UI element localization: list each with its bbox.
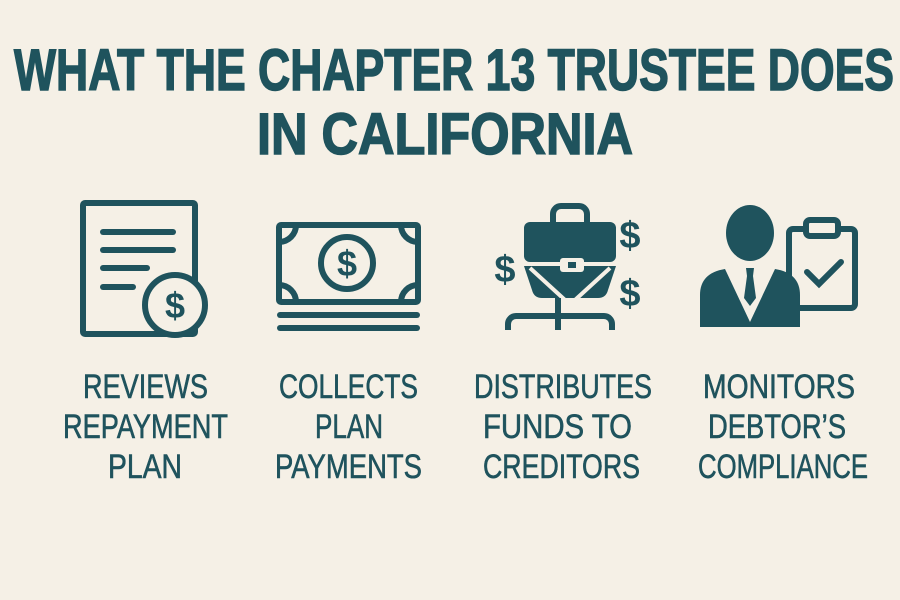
label: reviews repayment plan: PLAN bbox=[108, 448, 182, 486]
title bbox=[14, 38, 894, 167]
label: monitors compliance: DEBTOR’S bbox=[708, 408, 846, 446]
label: distributes funds: CREDITORS bbox=[483, 448, 640, 486]
icon: person with clipboard bbox=[700, 205, 855, 327]
label: distributes funds: DISTRIBUTES bbox=[474, 368, 652, 406]
icon: document with coin bbox=[83, 203, 205, 335]
icon: briefcase with dollars: $ bbox=[619, 215, 641, 257]
icon: banknote: $ bbox=[337, 243, 357, 284]
title: IN CALIFORNIA bbox=[257, 102, 633, 167]
label: distributes funds bbox=[474, 368, 652, 486]
icon: briefcase with dollars: $ bbox=[494, 249, 516, 291]
icon: banknote bbox=[279, 225, 418, 328]
label: collects plan payments: PAYMENTS bbox=[275, 448, 422, 486]
labels bbox=[63, 368, 868, 486]
icon: document with coin: $ bbox=[165, 285, 185, 326]
label: distributes funds: FUNDS TO bbox=[483, 408, 632, 446]
label: collects plan payments: PLAN bbox=[315, 408, 383, 446]
label: reviews repayment plan: REPAYMENT bbox=[63, 408, 228, 446]
icon: briefcase with dollars bbox=[494, 206, 641, 330]
label: collects plan payments: COLLECTS bbox=[279, 368, 418, 406]
label: monitors compliance bbox=[698, 368, 868, 486]
label: collects plan payments bbox=[275, 368, 422, 486]
label: reviews repayment plan: REVIEWS bbox=[83, 368, 208, 406]
label: monitors compliance: MONITORS bbox=[703, 368, 855, 406]
icon: briefcase with dollars: $ bbox=[619, 273, 641, 315]
label: reviews repayment plan bbox=[63, 368, 228, 486]
